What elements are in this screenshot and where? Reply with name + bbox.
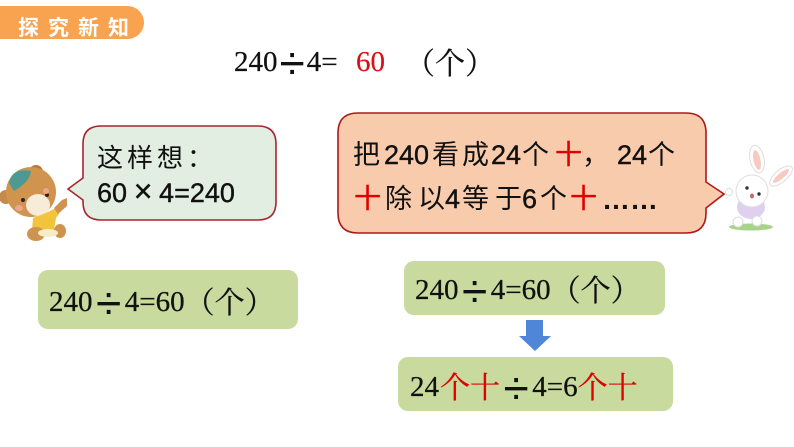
down arrow bbox=[519, 320, 551, 351]
line 2: 以 bbox=[418, 184, 445, 214]
line 2: 除 bbox=[385, 184, 412, 214]
line 1: 个 bbox=[522, 140, 549, 170]
line 1: ， bbox=[582, 140, 609, 170]
line 1: 24 bbox=[617, 140, 647, 170]
line 2: 等 bbox=[462, 184, 489, 214]
line 2: 于 bbox=[495, 184, 522, 214]
line 2: 十 bbox=[354, 184, 381, 214]
line 2: 60 4=240 bbox=[97, 178, 235, 208]
line 2: 十 bbox=[570, 184, 597, 214]
bottom formula box bbox=[398, 357, 673, 411]
line 1: 看 bbox=[432, 140, 459, 170]
unit: （个） bbox=[405, 48, 495, 81]
line 2: 6 bbox=[522, 184, 537, 214]
line 2: …… bbox=[602, 184, 658, 215]
right formula box bbox=[404, 261, 665, 315]
line 1: 把 bbox=[353, 140, 380, 170]
line 2: 个 bbox=[540, 184, 567, 214]
right bubble text bbox=[353, 140, 675, 215]
answer 60: 60 bbox=[356, 46, 385, 78]
tag text: 探究新知 bbox=[18, 17, 138, 40]
line 1: 成 bbox=[462, 140, 489, 170]
right speech bubble bbox=[338, 113, 724, 233]
line 2 bbox=[354, 184, 658, 215]
line 1 bbox=[353, 140, 675, 170]
line 1: 240 bbox=[384, 140, 429, 170]
icon: rabbit bbox=[726, 144, 794, 230]
line 1: 24 bbox=[491, 140, 521, 170]
line 2: 4 bbox=[445, 184, 460, 214]
left bubble text bbox=[97, 143, 235, 209]
line 1: 个 bbox=[648, 140, 675, 170]
line 1: 这样想： bbox=[97, 143, 217, 173]
formula: 24个十÷4=6个十 bbox=[410, 362, 638, 414]
icon: bear bbox=[0, 165, 67, 241]
left speech bubble bbox=[68, 126, 276, 220]
line 2: × bbox=[134, 173, 152, 209]
section tag: 探究新知 bbox=[0, 6, 144, 39]
equation heading bbox=[234, 37, 495, 89]
line 1: 十 bbox=[555, 140, 582, 170]
left formula box bbox=[38, 270, 298, 329]
formula: 240÷4=60（个） bbox=[415, 265, 641, 317]
equation left side: 240÷4= bbox=[234, 37, 338, 89]
formula: 240÷4=60（个） bbox=[49, 277, 275, 329]
